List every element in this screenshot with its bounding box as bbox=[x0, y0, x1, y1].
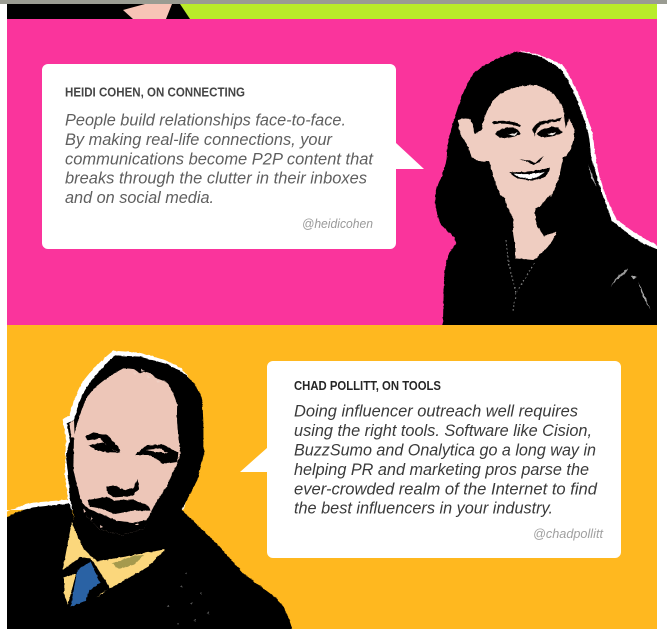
quote bbox=[294, 401, 598, 518]
top strip: previous section bbox=[0, 0, 667, 19]
orange background bbox=[7, 325, 657, 629]
quote: communications become P2P content that bbox=[65, 149, 374, 168]
quote: the best influencers in your industry. bbox=[294, 499, 553, 518]
handle: @heidicohen bbox=[302, 216, 373, 231]
quote: and on social media. bbox=[65, 188, 214, 207]
portrait: Heidi Cohen bbox=[435, 51, 663, 333]
nose bbox=[519, 155, 543, 165]
eyes bbox=[88, 442, 120, 453]
jaw shadow bbox=[499, 193, 552, 228]
hair, ears, beard bbox=[66, 355, 205, 527]
heading: CHAD POLLITT, ON TOOLS bbox=[294, 379, 441, 393]
quote: People build relationships face-to-face. bbox=[65, 111, 346, 130]
white cut-out outline bbox=[0, 351, 203, 515]
pink background bbox=[7, 19, 657, 325]
jacket texture bbox=[167, 572, 209, 624]
brows bbox=[85, 432, 178, 464]
quote: By making real-life connections, your bbox=[65, 130, 333, 149]
face bbox=[73, 368, 181, 535]
eyes bbox=[495, 127, 563, 138]
handle: @chadpollitt bbox=[533, 526, 604, 541]
moustache and mouth bbox=[87, 497, 150, 514]
tie bbox=[65, 557, 108, 609]
quote: BuzzSumo and Onalytica go a long way in bbox=[294, 440, 596, 459]
quote: using the right tools. Software like Cision, bbox=[294, 421, 592, 440]
face and neck bbox=[458, 85, 575, 260]
panel: Chad Pollitt bbox=[0, 325, 657, 629]
quote: Doing influencer outreach well requires bbox=[294, 401, 578, 420]
nose bbox=[106, 479, 139, 497]
quote: breaks through the clutter in their inboxes bbox=[65, 169, 367, 188]
speech bubble bbox=[42, 64, 424, 249]
portrait: Chad Pollitt bbox=[0, 351, 295, 629]
mouth bbox=[509, 168, 550, 180]
necklace and jacket highlights bbox=[506, 240, 535, 313]
quote bbox=[65, 111, 374, 207]
quote: ever-crowded realm of the Internet to find bbox=[294, 479, 598, 498]
beard stubble bbox=[82, 502, 151, 536]
speech bubble bbox=[240, 361, 621, 558]
heading: HEIDI COHEN, ON CONNECTING bbox=[65, 86, 245, 100]
shirt bbox=[63, 523, 165, 606]
brows bbox=[492, 117, 563, 137]
jacket bbox=[0, 503, 295, 629]
panel: Heidi Cohen bbox=[7, 19, 663, 333]
temple and hairline shading bbox=[134, 369, 179, 435]
quote: helping PR and marketing pros parse the bbox=[294, 460, 589, 479]
